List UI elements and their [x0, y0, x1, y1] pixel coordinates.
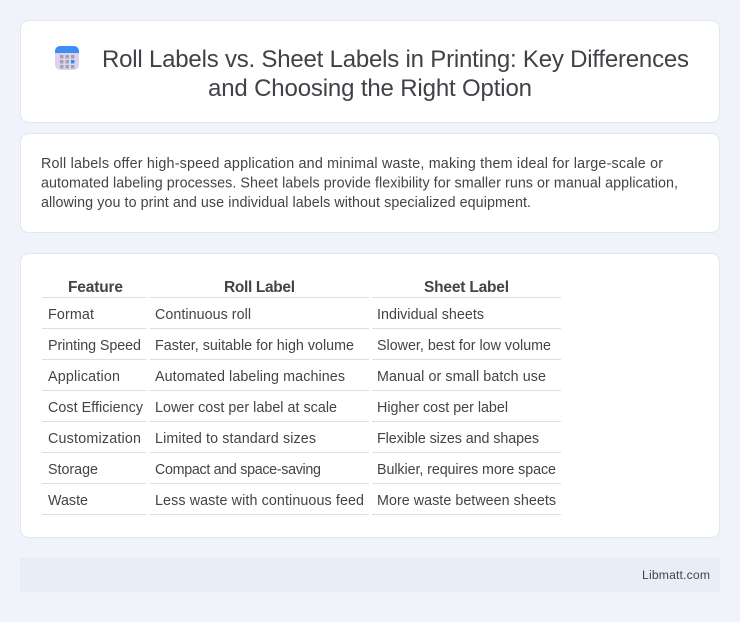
panel: header — [20, 20, 720, 122]
row: application: Application — [48, 369, 120, 385]
table header row — [68, 279, 509, 296]
row: format: Format — [48, 307, 94, 323]
icon: calendar grid — [55, 46, 79, 70]
row: application: Manual or small batch use — [377, 369, 546, 385]
row: storage: Storage — [48, 462, 98, 478]
title — [102, 46, 689, 102]
row: cost efficiency: Cost Efficiency — [48, 400, 144, 416]
table header row: Sheet Label — [424, 279, 509, 296]
row: printing speed: Printing Speed — [48, 338, 141, 354]
row: printing speed: Faster, suitable for high volume — [155, 338, 354, 354]
row: customization: Flexible sizes and shapes — [377, 431, 539, 447]
footer — [20, 558, 720, 592]
panel: intro paragraph — [20, 134, 720, 232]
row: customization — [48, 431, 539, 447]
row: printing speed — [48, 338, 551, 354]
row: waste: Waste — [48, 493, 88, 509]
row: customization: Limited to standard sizes — [155, 431, 316, 447]
panel: intro paragraph: Roll labels offer high-speed application and minimal waste, making them ideal for large-scale or — [41, 156, 663, 172]
row: cost efficiency — [48, 400, 508, 416]
row: waste: More waste between sheets — [377, 493, 556, 509]
footer: Libmatt.com — [642, 568, 710, 582]
row: customization: Customization — [48, 431, 141, 447]
row: printing speed: Slower, best for low volume — [377, 338, 551, 354]
row: format — [48, 307, 484, 323]
table header row: Roll Label — [224, 279, 295, 296]
row: storage — [48, 462, 556, 478]
title: and Choosing the Right Option — [208, 75, 532, 102]
table header row: Feature — [68, 279, 123, 296]
row: application — [48, 369, 546, 385]
panel: intro paragraph: allowing you to print and use individual labels without specialized equipment. — [41, 195, 531, 211]
row: waste — [48, 493, 556, 509]
panel: comparison table — [20, 254, 720, 538]
row: application: Automated labeling machines — [155, 369, 345, 385]
title: Roll Labels vs. Sheet Labels in Printing: Key Differences — [102, 46, 689, 73]
row: storage: Compact and space-saving — [155, 462, 321, 478]
panel: intro paragraph: automated labeling processes. Sheet labels provide flexibility for smaller runs or manual application, — [41, 176, 678, 192]
row: format: Continuous roll — [155, 307, 251, 323]
row: cost efficiency: Higher cost per label — [377, 400, 508, 416]
row: waste: Less waste with continuous feed — [155, 493, 364, 509]
row: format: Individual sheets — [377, 307, 484, 323]
row: storage: Bulkier, requires more space — [377, 462, 556, 478]
row: cost efficiency: Lower cost per label at scale — [155, 400, 337, 416]
